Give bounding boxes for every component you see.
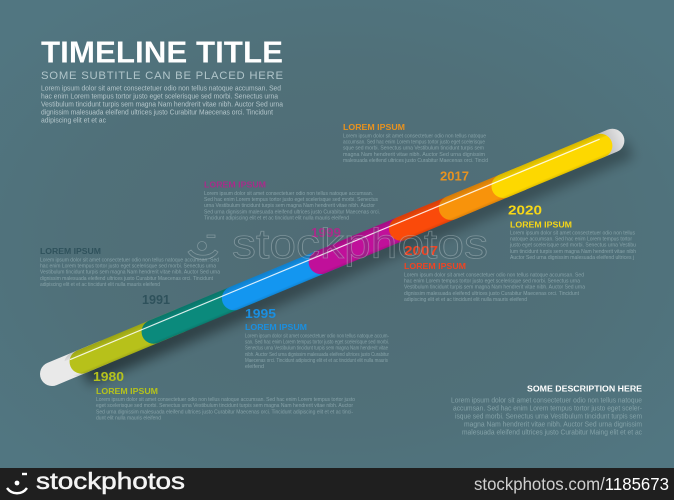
heading 1991: LOREM IPSUM: [40, 247, 101, 256]
text 1991: dignissim malesuada eleifend ultrices justo Curabitur Maecenas orci. Tincidunt: [40, 276, 214, 282]
text 1999: Sed urna dignissim malesuada eleifend ultrices justo Curabitur Maecenas orci.: [204, 209, 380, 215]
event 1995: [245, 306, 389, 370]
description text: accumsan. Sed hac enim Lorem tempus tortor justo eget sceler-: [453, 406, 643, 412]
text 1995: nibh. Auctor Sed urna dignissim malesuada eleifend ultrices justo Curabitur: [245, 352, 389, 358]
segment 1999: [305, 202, 443, 278]
text 1991: [40, 258, 220, 288]
text 1995: san. Sed hac enim Lorem tempus tortor justo eget scelerisque sed morbi.: [245, 340, 389, 346]
diagonal timeline tube: [36, 125, 628, 390]
year 2007: 2007: [404, 243, 438, 258]
watermark wordmark: stockphotos: [232, 220, 488, 267]
text 2017: [343, 134, 488, 164]
intro text: Vestibulum tincidunt turpis sem magna Nam hendrerit vitae nibh. Auctor Sed urna: [41, 100, 283, 108]
text 1991: adipiscing elit et et ac tincidunt elit nulla mauris eleifend: [40, 282, 160, 288]
text 2017: Lorem ipsum dolor sit amet consectetuer odio non tellus natoque: [343, 134, 486, 140]
text 2020: Auctor Sed urna dignissim malesuada eleifend ultrices j: [510, 255, 634, 261]
text 1999: urna Vestibulum tincidunt turpis sem magna Nam hendrerit vitae nibh. Auctor: [204, 203, 375, 209]
text 1995: eleifend: [245, 364, 264, 370]
text 2020: [509, 230, 636, 261]
text 2017: malesuada eleifend ultrices justo Curabitur Maecenas orci. Tincid: [343, 158, 488, 164]
year 2020: 2020: [508, 202, 542, 218]
tube highlight: [70, 138, 600, 360]
segment 2017: [435, 163, 537, 224]
text 1980: dunt elit nulla mauris eleifend: [96, 416, 161, 422]
text 2020: natoque accumsan. Sed hac enim Lorem tempus tortor: [510, 237, 632, 243]
text 1995: Lorem ipsum dolor sit amet consectetuer odio non tellus natoque accum-: [245, 334, 389, 340]
text 2020: lum tincidunt turpis sem magna Nam hendrerit vitae nibh: [510, 249, 636, 255]
event 1991: [40, 247, 220, 307]
heading 2007: LOREM IPSUM: [404, 262, 466, 271]
text 2017: magna Nam hendrerit vitae nibh. Auctor Sed urna dignissim: [343, 152, 485, 158]
title block: [41, 34, 283, 124]
description text: isque sed morbi. Senectus urna Vestibulum tincidunt turpis sem: [455, 414, 642, 420]
text 1980: eget scelerisque sed morbi. Senectus urna Vestibulum tincidunt turpis sem magna Nam hendrerit vitae nibh. Auctor: [96, 403, 353, 409]
watermark logo: [188, 235, 218, 260]
intro text: dignissim malesuada eleifend ultrices justo Curabitur Maecenas orci. Tincidunt: [41, 108, 273, 116]
text 1995: Senectus urna Vestibulum tincidunt turpis sem magna Nam hendrerit vitae: [245, 346, 388, 352]
text 1999: Lorem ipsum dolor sit amet consectetuer odio non tellus natoque accumsan.: [204, 191, 373, 197]
text 2007: dignissim malesuada eleifend ultrices justo Curabitur Maecenas orci. Tincidunt: [404, 291, 580, 297]
tube end cap: right: [574, 125, 628, 166]
title: TIMELINE TITLE: [41, 34, 283, 70]
year 1991: 1991: [142, 292, 170, 307]
heading 1980: LOREM IPSUM: [96, 387, 158, 396]
footer wordmark: stockphotos: [36, 468, 185, 494]
text 1980: [96, 397, 355, 422]
description text: magna Nam hendrerit vitae nibh. Auctor Sed urna dignissim: [464, 422, 642, 428]
heading 1999: LOREM IPSUM: [204, 180, 266, 190]
year 1980: 1980: [93, 369, 124, 384]
tube end cap: left: [36, 337, 119, 390]
intro text: [41, 84, 283, 124]
intro text: hac enim Lorem tempus tortor justo eget scelerisque sed morbi. Senectus urna: [41, 92, 278, 100]
event 2017: [343, 123, 488, 184]
heading 2020: LOREM IPSUM: [510, 220, 572, 230]
description text: malesuada eleifend ultrices justo Curabitur Maing elit et et ac: [462, 430, 642, 436]
text 1995: Maecenas orci. Tincidunt adipiscing elit et et ac tincidunt elit nulla mauris: [245, 358, 388, 364]
text 2007: Lorem ipsum dolor sit amet consectetuer odio non tellus natoque accumsan. Sed: [404, 272, 584, 278]
intro text: adipiscing elit et et ac: [41, 116, 106, 124]
text 1991: hac enim Lorem tempus tortor justo eget scelerisque sed morbi. Senectus urna: [40, 264, 216, 270]
segment 1991: [138, 271, 276, 347]
description heading: SOME DESCRIPTION HERE: [527, 384, 643, 394]
tube shadow: [81, 139, 634, 385]
text 2017: sque sed morbi. Senectus urna Vestibulum tincidunt turpis sem: [343, 146, 484, 152]
subtitle: SOME SUBTITLE CAN BE PLACED HERE: [41, 70, 283, 82]
description text: [451, 398, 643, 436]
text 1999: Tincidunt adipiscing elit et et ac tincidunt elit nulla mauris eleifend: [204, 215, 349, 221]
text 1991: Lorem ipsum dolor sit amet consectetuer odio non tellus natoque accumsan. Sed: [40, 258, 219, 264]
event 2007: [404, 243, 585, 303]
event 1980: [93, 369, 355, 422]
heading 1995: LOREM IPSUM: [245, 323, 307, 332]
text 2007: hac enim Lorem tempus tortor justo eget scelerisque sed morbi. Senectus urna: [404, 279, 580, 285]
text 2007: [404, 272, 585, 303]
text 2020: justo eget scelerisque sed morbi. Senectus urna Vestibu: [509, 243, 636, 249]
watermark: [188, 220, 488, 267]
text 2007: Vestibulum tincidunt turpis sem magna Nam hendrerit vitae nibh. Auctor Sed urna: [404, 285, 585, 291]
event 2020: [508, 202, 636, 261]
tube shading: [60, 130, 616, 380]
text 2020: Lorem ipsum dolor sit amet consectetuer odio non tellus: [510, 230, 635, 236]
text 2007: adipiscing elit et et ac tincidunt elit nulla mauris eleifend: [404, 297, 527, 303]
heading 2017: LOREM IPSUM: [343, 123, 405, 132]
text 1980: Sed urna dignissim malesuada eleifend ultrices justo Curabitur Maecenas orci. Tincidunt adipiscing elit et et ac tinci-: [96, 409, 353, 415]
segment 1995: [218, 238, 357, 314]
event 1999: [204, 180, 380, 240]
year 1995: 1995: [245, 306, 276, 321]
text 1995: [245, 334, 389, 370]
footer logo: [7, 474, 27, 493]
segment 1980: [66, 305, 195, 377]
description text: Lorem ipsum dolor sit amet consectetuer odio non tellus natoque: [451, 398, 642, 404]
text 2017: accumsan. Sed hac enim Lorem tempus tortor justo eget scelerisque: [343, 140, 485, 146]
year 1999: 1999: [311, 225, 341, 240]
segment 2020: [488, 130, 616, 202]
segment 2007: [385, 184, 487, 244]
intro text: Lorem ipsum dolor sit amet consectetuer odio non tellus natoque accumsan. Sed: [41, 84, 281, 92]
text 1999: [204, 191, 380, 221]
text 1980: Lorem ipsum dolor sit amet consectetuer odio non tellus natoque accumsan. Sed hac enim Lorem tempus tortor justo: [96, 397, 355, 403]
footer bar: [0, 468, 674, 500]
text 1999: Sed hac enim Lorem tempus tortor justo eget scelerisque sed morbi. Senectus: [204, 197, 378, 203]
footer image id: stockphotos.com/1185673: [474, 474, 669, 494]
year 2017: 2017: [440, 168, 469, 184]
text 1991: Vestibulum tincidunt turpis sem magna Nam hendrerit vitae nibh. Auctor Sed urna: [40, 270, 220, 276]
description block: [451, 384, 643, 436]
